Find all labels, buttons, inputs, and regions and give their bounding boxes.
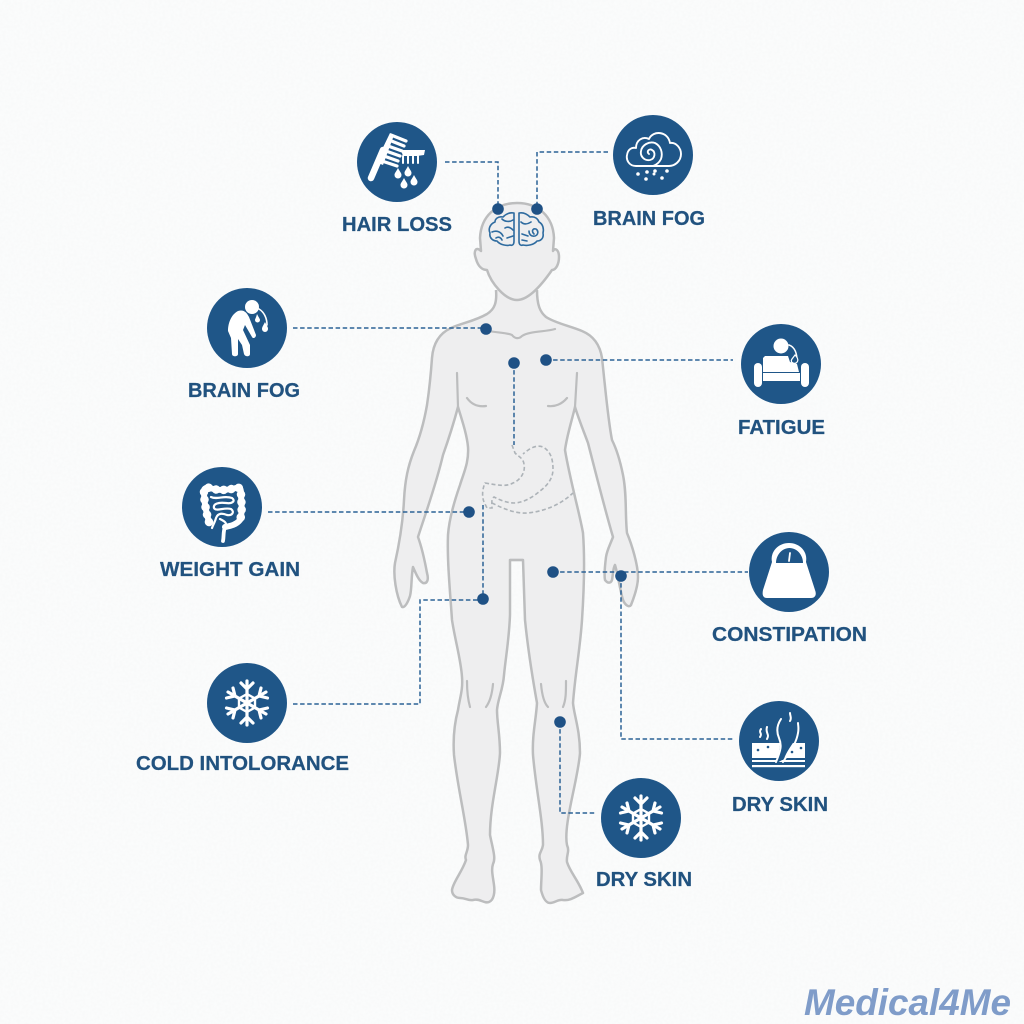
label: dry skin (lower): DRY SKIN <box>596 868 692 891</box>
icon: snowflake (lower) <box>601 778 681 858</box>
label: weight gain: WEIGHT GAIN <box>160 558 300 581</box>
label: brain fog (left): BRAIN FOG <box>188 379 300 402</box>
icon: brain fog cloud <box>613 115 693 195</box>
icon: dry skin layers <box>739 701 819 781</box>
icon: person bent over <box>207 288 287 368</box>
icon: brain <box>489 213 543 245</box>
human body figure <box>394 203 638 903</box>
icon: hair loss <box>357 122 437 202</box>
label: dry skin (right): DRY SKIN <box>732 793 828 816</box>
watermark: Medical4Me <box>804 982 1011 1023</box>
icon: fatigue on sofa <box>741 324 821 404</box>
marker dots <box>463 203 627 728</box>
label: brain fog: BRAIN FOG <box>593 207 705 230</box>
label: cold intolerance: COLD INTOLORANCE <box>136 752 349 775</box>
connector lines <box>268 152 748 813</box>
label: hair loss: HAIR LOSS <box>342 213 452 236</box>
label: fatigue: FATIGUE <box>738 416 825 439</box>
icon: snowflake <box>207 663 287 743</box>
icon: intestines <box>182 467 262 547</box>
stomach outline <box>483 445 573 513</box>
label: constipation: CONSTIPATION <box>712 623 867 646</box>
icon: weighing scale <box>749 532 829 612</box>
